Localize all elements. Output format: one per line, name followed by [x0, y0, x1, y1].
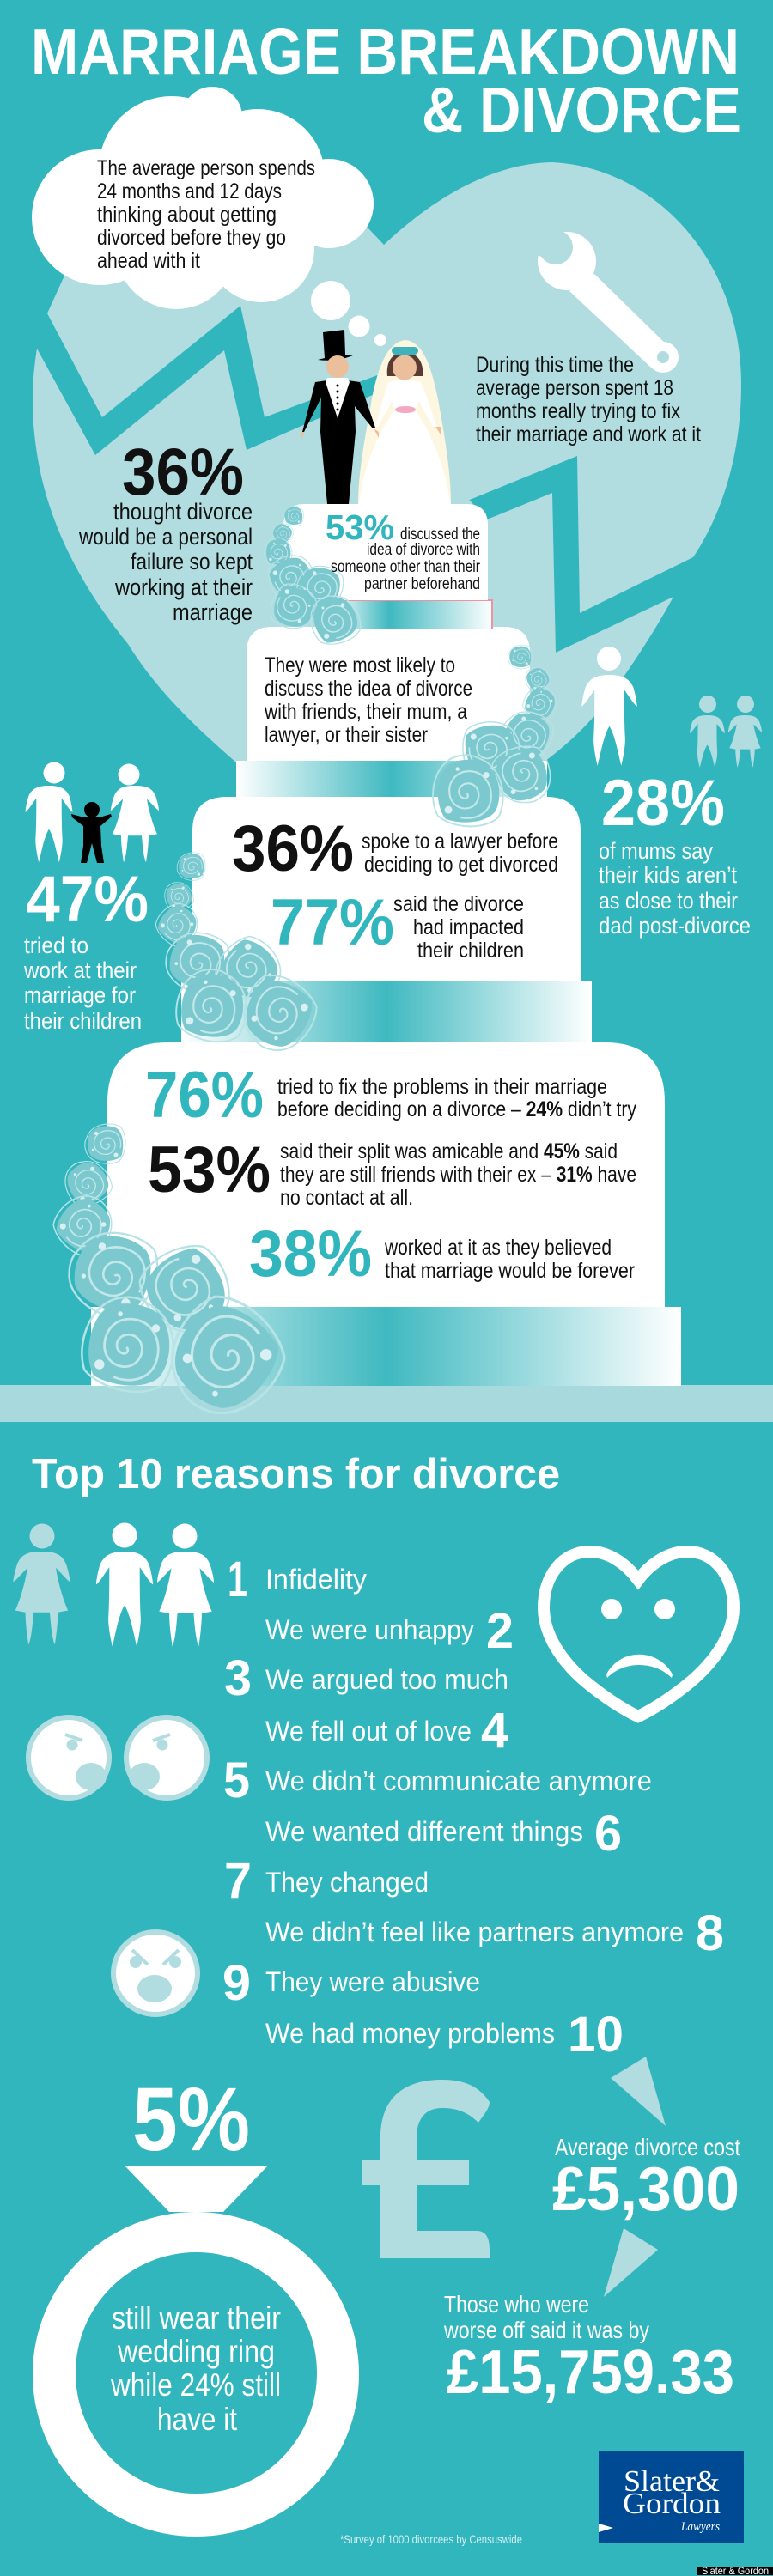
reasons list: We wanted different things — [265, 1816, 583, 1847]
cloud text: divorced before they go — [97, 226, 286, 250]
ring text — [110, 2300, 281, 2437]
tier 2 text: with friends, their mum, a — [264, 700, 467, 724]
cloud text: 24 months and 12 days — [97, 179, 282, 204]
tier 2 text: lawyer, or their sister — [265, 723, 428, 747]
tier 3 text: 36% and 77%: their children — [417, 939, 524, 963]
ring text: still wear their — [112, 2300, 281, 2336]
tier 4 text: 76%, 53%, 38%: 76% — [145, 1059, 264, 1132]
icon: large pound sign — [362, 2080, 490, 2258]
ring text: wedding ring — [117, 2334, 275, 2369]
tier 4 text: 76%, 53%, 38%: before deciding on a divorce – 24% didn’t try — [277, 1097, 636, 1121]
during this time text: their marriage and work at it — [476, 422, 701, 447]
heading: top 10 reasons: Top 10 reasons for divorce — [32, 1451, 560, 1498]
footnote: *Survey of 1000 divorcees by Censuswide — [340, 2532, 522, 2546]
stat: 28% mums: their kids aren’t — [599, 862, 737, 888]
tier 4 text: 76%, 53%, 38%: 53% — [148, 1133, 271, 1206]
tier 4 text: 76%, 53%, 38%: worked at it as they believed — [384, 1236, 612, 1260]
cost figures — [443, 2134, 740, 2407]
tier 1 text: 53% discussed: 53% — [326, 507, 394, 547]
reasons list: 8 — [696, 1905, 724, 1961]
logo: Slater& — [624, 2464, 720, 2498]
tier 4 text: 76%, 53%, 38%: no contact at all. — [280, 1186, 413, 1210]
rose decorations — [45, 506, 563, 1435]
stat: 36% personal failure: failure so kept — [131, 549, 253, 574]
stat: 47% children: 47% — [26, 863, 149, 936]
stat: 36% personal failure: marriage — [173, 599, 253, 625]
cloud text: ahead with it — [97, 249, 200, 273]
tier 3 text: 36% and 77%: said the divorce — [393, 892, 524, 916]
bride and groom — [301, 330, 451, 504]
tier 2 text: discuss the idea of divorce — [265, 677, 472, 701]
cloud text — [97, 156, 315, 273]
icon: adult and two children — [581, 647, 762, 768]
tier 3 text: 36% and 77%: deciding to get divorced — [364, 853, 558, 877]
icon: arguing faces — [28, 1717, 207, 1798]
reasons list: 5 — [223, 1753, 250, 1808]
cost figures: worse off said it was by — [443, 2317, 649, 2343]
reasons list: Infidelity — [265, 1564, 367, 1595]
during this time text: average person spent 18 — [476, 376, 673, 400]
thought cloud — [32, 87, 386, 346]
tier 3 text: 36% and 77% — [232, 812, 558, 963]
icon: wedding ring — [33, 2166, 359, 2537]
reasons list: 3 — [224, 1650, 252, 1706]
reasons list: 1 — [228, 1552, 247, 1607]
reasons list: 10 — [568, 2007, 624, 2063]
reasons list: We didn’t communicate anymore — [265, 1765, 652, 1796]
tier 3 text: 36% and 77%: 36% — [232, 812, 354, 885]
wedding cake — [0, 504, 773, 1422]
icon: family with child — [26, 762, 159, 863]
reasons list: We didn’t feel like partners anymore — [265, 1917, 684, 1947]
tier 3 text: 36% and 77%: spoke to a lawyer before — [362, 829, 558, 854]
ring text: have it — [157, 2402, 238, 2437]
tier 1 text: 53% discussed: discussed the — [400, 526, 480, 544]
stat: 36% personal failure — [78, 435, 253, 625]
tier 4 text: 76%, 53%, 38%: 38% — [249, 1218, 372, 1291]
stat: 47% children: work at their — [23, 957, 137, 983]
during this time text — [476, 353, 701, 447]
logo: Gordon — [623, 2487, 721, 2520]
stat: 47% children — [23, 863, 149, 1034]
stat: 28% mums: as close to their — [599, 888, 738, 914]
reasons list: They changed — [265, 1867, 429, 1898]
tier 1 text: 53% discussed: idea of divorce with — [367, 541, 480, 559]
stat: 47% children: their children — [24, 1008, 142, 1034]
reasons list: We were unhappy — [265, 1614, 474, 1645]
tier 4 text: 76%, 53%, 38%: that marriage would be forever — [385, 1259, 635, 1283]
icon: sad heart — [544, 1552, 733, 1716]
reasons list: 7 — [224, 1853, 252, 1909]
icon: wrench — [533, 225, 679, 373]
tier 4 text: 76%, 53%, 38%: said their split was amicable and 45% said — [280, 1139, 618, 1163]
cost figures: £5,300 — [552, 2155, 740, 2224]
cloud text: thinking about getting — [97, 203, 277, 227]
title — [31, 15, 741, 146]
tier 1 text: 53% discussed — [326, 507, 481, 593]
logo — [599, 2451, 744, 2543]
stat: 36% personal failure: working at their — [114, 574, 253, 600]
stat: 28% mums: 28% — [601, 767, 725, 840]
tier 1 text: 53% discussed: someone other than their — [331, 558, 481, 576]
stat: 28% mums — [599, 767, 751, 939]
reasons list: We argued too much — [265, 1664, 508, 1695]
reasons list: We fell out of love — [265, 1716, 472, 1747]
cloud text: The average person spends — [97, 156, 315, 180]
reasons list — [222, 1552, 724, 2063]
logo: Lawyers — [680, 2520, 720, 2534]
cost figures: £15,759.33 — [447, 2338, 734, 2407]
tier 4 text: 76%, 53%, 38%: tried to fix the problems in their marriage — [277, 1075, 607, 1099]
reasons list: 9 — [222, 1955, 251, 2011]
stat: 47% children: marriage for — [24, 982, 136, 1008]
tier 2 text: They were most likely to — [265, 653, 455, 677]
stat: 47% children: tried to — [24, 933, 88, 958]
during this time text: During this time the — [476, 353, 634, 377]
reasons list: We had money problems — [265, 2018, 555, 2049]
reasons list: 2 — [486, 1603, 514, 1659]
tier 4 text: 76%, 53%, 38%: they are still friends with their ex – 31% have — [280, 1163, 636, 1187]
title: & DIVORCE — [422, 74, 741, 146]
stat: 28% mums: dad post-divorce — [599, 913, 751, 939]
cost figures: Average divorce cost — [555, 2134, 740, 2160]
reasons list: 4 — [481, 1703, 508, 1759]
tier 1 text: 53% discussed: partner beforehand — [364, 575, 480, 593]
broken heart background — [33, 162, 741, 859]
reasons list: They were abusive — [265, 1966, 480, 1997]
tier 3 text: 36% and 77%: had impacted — [413, 915, 524, 939]
tier 2 text — [264, 653, 472, 747]
stat: 36% personal failure: would be a personal — [78, 524, 253, 550]
icon: shouting face — [113, 1932, 198, 2014]
reasons list: 6 — [594, 1806, 622, 1862]
stat: 5%: 5% — [132, 2069, 250, 2170]
tier 4 text: 76%, 53%, 38% — [145, 1059, 636, 1291]
during this time text: months really trying to fix — [476, 399, 680, 423]
icon: triangles — [604, 2057, 666, 2297]
cost figures: Those who were — [444, 2291, 589, 2318]
stat: 28% mums: of mums say — [599, 838, 713, 864]
stat: 36% personal failure: 36% — [122, 435, 244, 509]
ring text: while 24% still — [110, 2367, 281, 2403]
stat: 36% personal failure: thought divorce — [113, 499, 253, 525]
icon: three figures — [13, 1523, 214, 1646]
tier 3 text: 36% and 77%: 77% — [271, 886, 394, 959]
